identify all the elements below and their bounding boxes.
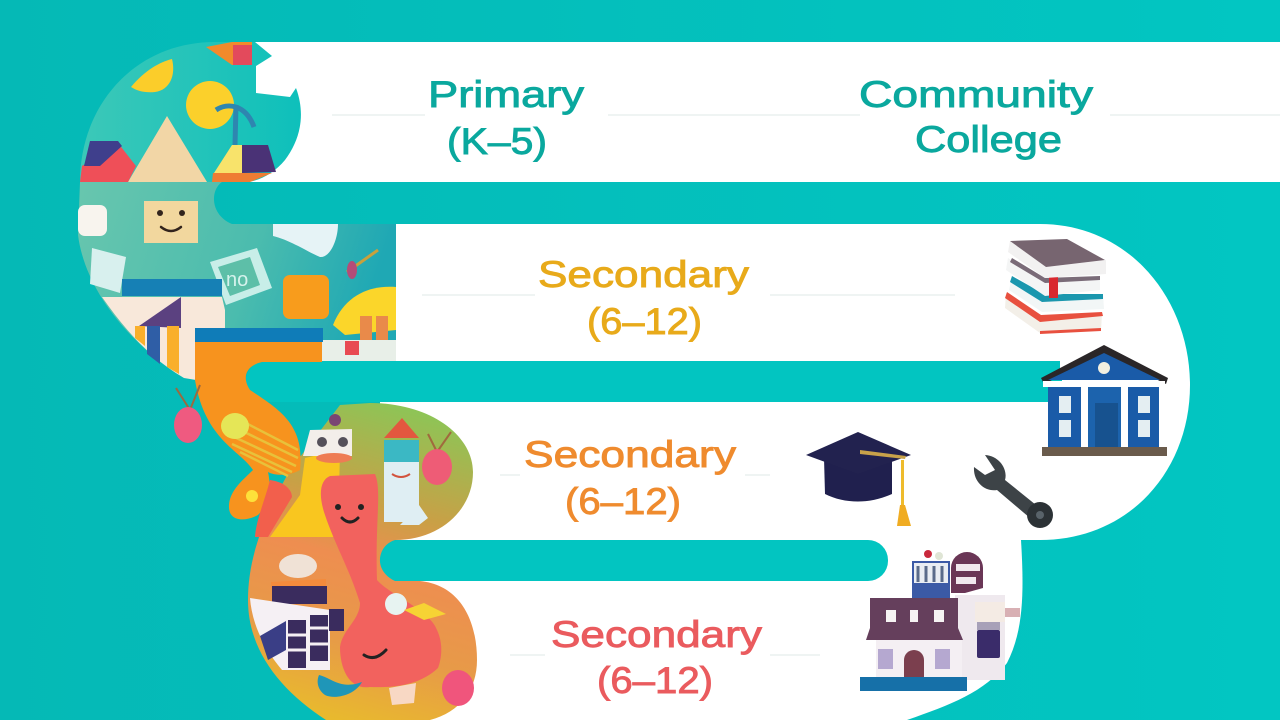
- shape: tower character: [384, 418, 428, 525]
- shape: small brush: [347, 250, 378, 272]
- shape: dark school: [250, 554, 344, 670]
- shape: paper sheet: [273, 224, 338, 257]
- shape: blue swoosh: [318, 675, 362, 697]
- shape: leaf ball: [221, 413, 249, 439]
- door: [904, 650, 924, 677]
- illustration: middle-school scene: [78, 182, 396, 380]
- shape: cream building: [102, 297, 225, 380]
- right kiosk: [975, 602, 1020, 658]
- heading: Community College: College: [915, 119, 1062, 160]
- shape: pink blob: [442, 670, 474, 706]
- heading: Secondary red: Secondary: [551, 614, 763, 655]
- shape: purple tower: [242, 145, 276, 173]
- blue tower: [912, 550, 950, 599]
- shape: orange base: [212, 173, 272, 182]
- shape: striped leaf: [232, 420, 298, 476]
- icon: college building: [1041, 345, 1168, 456]
- shape: yellow splash: [404, 603, 446, 620]
- shape: yellow star: [270, 450, 340, 537]
- shape: yellow tower: [214, 145, 242, 173]
- blue base: [860, 677, 967, 691]
- roof: [866, 598, 963, 640]
- heading: Secondary orange: Secondary: [524, 434, 737, 475]
- heading: Secondary yellow: (6–12): [587, 301, 702, 342]
- shape: blue column: [147, 326, 160, 364]
- faint rules: [332, 115, 1280, 655]
- shape: beige triangle: [128, 116, 207, 182]
- shape: tree building: [360, 316, 388, 340]
- shape: yellow column: [167, 326, 179, 374]
- shape: red block: [345, 341, 359, 355]
- panel: lowest band: [400, 540, 1023, 720]
- heading: Secondary red: (6–12): [597, 660, 713, 701]
- shape: smiling square: [144, 201, 198, 243]
- icon: lower building: [860, 550, 1020, 691]
- heading: Primary: Primary: [428, 74, 585, 115]
- shape: white blob: [78, 205, 107, 236]
- illustration: lower scene: [174, 328, 477, 720]
- shape: red mountain: [80, 143, 136, 182]
- shape: pink fruit right: [422, 432, 452, 485]
- panel: secondary band with rounded right end: [380, 224, 1190, 540]
- heading: Primary: (K–5): [447, 121, 547, 162]
- heading: Primary: [428, 74, 585, 162]
- shape: yellow dot: [246, 490, 258, 502]
- shape: orange block: [195, 328, 323, 519]
- shape: orange column: [135, 326, 145, 346]
- shape: pale ground: [322, 340, 396, 361]
- shape: purple mountain: [84, 141, 122, 166]
- shape: pink fruit left: [174, 385, 202, 443]
- heading: Secondary yellow: [538, 254, 750, 342]
- shape: top box: [303, 414, 352, 463]
- shape: orange and red corner: [206, 42, 252, 65]
- heading: Secondary yellow: Secondary: [538, 254, 750, 295]
- mailbox: [951, 552, 983, 593]
- shape: red accent: [255, 480, 292, 537]
- heading: Secondary orange: [524, 434, 737, 522]
- roof ornaments: [886, 610, 944, 622]
- shape: tilted card right: no: [226, 269, 248, 291]
- panel: primary band: [240, 42, 1280, 182]
- heading: Community College: [859, 74, 1094, 160]
- shape: purple roof: [139, 297, 181, 328]
- wall: [955, 595, 1005, 680]
- icon: graduation cap: [806, 432, 911, 526]
- shape: peach block: [389, 683, 416, 705]
- shape: small cloud: [385, 593, 407, 615]
- shape: palm tree: [216, 105, 254, 145]
- windows: [878, 649, 950, 669]
- shape: big red character: [321, 474, 441, 687]
- heading: Secondary orange: (6–12): [565, 481, 681, 522]
- shape: yellow half circle: [131, 59, 173, 92]
- heading: Secondary red: [551, 614, 763, 701]
- icon: wrench: [974, 455, 1053, 528]
- illustration: primary scene: [80, 42, 301, 182]
- shape: sun: [186, 81, 234, 129]
- shape: blue bar: [122, 279, 222, 296]
- teal connector: lower: [378, 540, 888, 581]
- shape: orange rounded square: [283, 275, 329, 319]
- shape: yellow tree: [333, 287, 396, 335]
- icon: books: [1005, 239, 1106, 334]
- shape: tilted card left: [90, 248, 126, 293]
- heading: Community College: Community: [859, 74, 1094, 115]
- shape: plum blob: [347, 261, 357, 279]
- facade: [876, 640, 962, 677]
- teal connector: middle: [245, 361, 1062, 402]
- shape: tilted card right: [210, 248, 272, 305]
